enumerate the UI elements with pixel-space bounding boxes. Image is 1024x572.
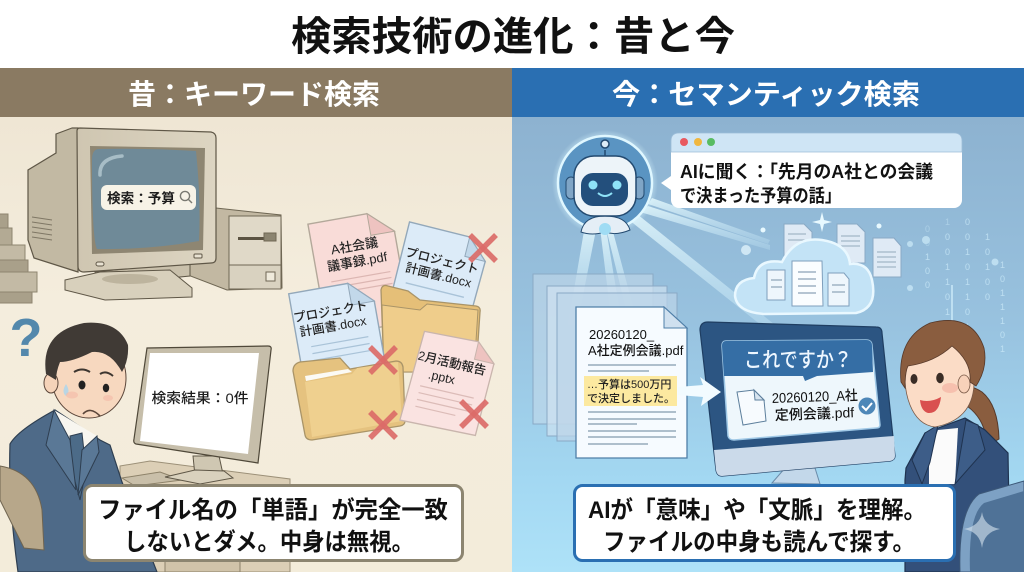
document: minutes pdf: 議事録.pdf <box>326 249 389 274</box>
icon: desktop tower <box>180 208 282 290</box>
document: project plan right: 計画書.docx <box>404 260 474 291</box>
result card <box>722 340 880 440</box>
result card: 20260120_A社 <box>772 387 858 406</box>
callout: past limitation: ファイル名の「単語」が完全一致 <box>98 496 448 524</box>
binary data rain: 1 <box>945 307 950 317</box>
document: meeting pdf <box>576 307 687 458</box>
icon: red crosses <box>370 235 496 438</box>
document: activity report: 2月活動報告 <box>417 348 488 378</box>
document: activity report <box>400 328 498 438</box>
binary data rain: 0 <box>925 238 930 248</box>
binary data rain: 1 <box>925 252 930 262</box>
desk <box>120 461 290 572</box>
document: meeting pdf: A社定例会議.pdf <box>588 343 684 358</box>
stacked background pages <box>533 274 677 441</box>
heading: past <box>0 68 512 117</box>
binary data rain: 0 <box>925 224 930 234</box>
woman at computer <box>901 320 1010 572</box>
binary data rain: 0 <box>965 232 970 242</box>
document: project plan left: プロジェクト <box>292 298 369 325</box>
binary data rain: 1 <box>945 262 950 272</box>
binary data rain: 0 <box>985 292 990 302</box>
binary data rain: 0 <box>945 292 950 302</box>
heading: past: 昔：キーワード検索 <box>128 79 380 110</box>
panel: present semantic search <box>512 68 1024 572</box>
document: meeting pdf: 20260120_ <box>589 327 655 342</box>
callout: present benefit <box>574 486 954 560</box>
binary data rain: 0 <box>945 232 950 242</box>
document: activity report: .pptx <box>427 367 457 387</box>
head <box>52 338 126 418</box>
monitor screen <box>92 149 200 249</box>
icon: front folder <box>293 358 405 440</box>
highlighted snippet: …予算は500万円 <box>587 377 671 391</box>
binary data rain: 0 <box>965 337 970 347</box>
binary data rain: 1 <box>1000 288 1005 298</box>
icon: stacked disks <box>0 214 37 303</box>
document: project plan right: プロジェクト <box>404 245 480 277</box>
document: project plan right <box>385 222 490 341</box>
light beams <box>568 198 800 345</box>
binary data rain: 0 <box>965 262 970 272</box>
icon: rear folder <box>381 286 480 372</box>
speech bubble: AI query: AIに聞く：「先月のA社との会議 <box>680 162 933 182</box>
document: minutes pdf <box>308 210 410 336</box>
binary data rain: 1 <box>985 232 990 242</box>
highlighted snippet <box>584 376 677 406</box>
binary data rain: 0 <box>965 217 970 227</box>
binary data rain: 1 <box>945 217 950 227</box>
icon: file <box>737 390 766 425</box>
ponytail <box>964 386 999 441</box>
heading: present <box>512 68 1024 117</box>
man at computer <box>10 308 157 572</box>
speech bubble: AI query <box>661 133 962 208</box>
icon: check <box>858 398 876 414</box>
document: project plan left <box>289 279 390 402</box>
document: project plan left: 計画書.docx <box>299 313 368 339</box>
binary data rain: 1 <box>1000 316 1005 326</box>
binary data rain: 1 <box>1000 260 1005 270</box>
binary data rain: 0 <box>1000 330 1005 340</box>
icon: magnifier <box>180 191 192 203</box>
icon: question mark: ? <box>10 308 42 368</box>
title: 検索技術の進化：昔と今 <box>291 15 735 59</box>
callout: present benefit: AIが「意味」や「文脈」を理解。 <box>588 496 926 524</box>
binary data rain: 1 <box>1000 302 1005 312</box>
search box <box>101 185 196 210</box>
hair <box>901 320 985 388</box>
callout: past limitation <box>84 486 462 560</box>
binary data rain: 1 <box>985 262 990 272</box>
file pile <box>289 210 498 440</box>
jacket <box>905 418 1010 572</box>
result card: 定例会議.pdf <box>775 404 855 423</box>
monitor: AI result <box>700 322 895 484</box>
face <box>905 343 974 427</box>
binary data rain: 1 <box>965 322 970 332</box>
monitor: zero results: 検索結果：0件 <box>152 390 248 406</box>
arrow: snippet to result <box>678 377 721 406</box>
icon: office chair <box>0 466 44 550</box>
icon: robot <box>552 130 658 236</box>
search box: 検索：予算 <box>107 190 175 206</box>
icon: CRT monitor <box>28 128 216 300</box>
binary data rain: 0 <box>1000 274 1005 284</box>
callout: present benefit: ファイルの中身も読んで探す。 <box>603 529 915 556</box>
icon: sparkle watermark <box>964 512 1000 548</box>
binary data rain: 0 <box>925 280 930 290</box>
binary data rain: 1 <box>965 277 970 287</box>
heading: present: 今：セマンティック検索 <box>612 79 920 110</box>
monitor: zero results <box>134 346 271 484</box>
result card: これですか？ <box>744 349 852 372</box>
binary data rain <box>907 217 1005 354</box>
document: minutes pdf: A社会議 <box>330 234 379 257</box>
binary data rain: 1 <box>1000 344 1005 354</box>
callout: past limitation: しないとダメ。中身は無視。 <box>124 528 414 556</box>
binary data rain: 0 <box>985 247 990 257</box>
icon: cloud with documents <box>735 212 901 314</box>
binary data rain: 0 <box>945 247 950 257</box>
binary data rain: 1 <box>965 247 970 257</box>
office chair <box>960 481 1024 572</box>
speech bubble: AI query: で決まった予算の話」 <box>680 185 841 206</box>
binary data rain: 0 <box>985 277 990 287</box>
suit body <box>10 410 157 572</box>
highlighted snippet: で決定しました。 <box>587 391 675 405</box>
binary data rain: 0 <box>925 266 930 276</box>
binary data rain: 1 <box>965 292 970 302</box>
panel: past keyword search <box>0 68 512 572</box>
binary data rain: 0 <box>965 307 970 317</box>
binary data rain: 1 <box>945 277 950 287</box>
